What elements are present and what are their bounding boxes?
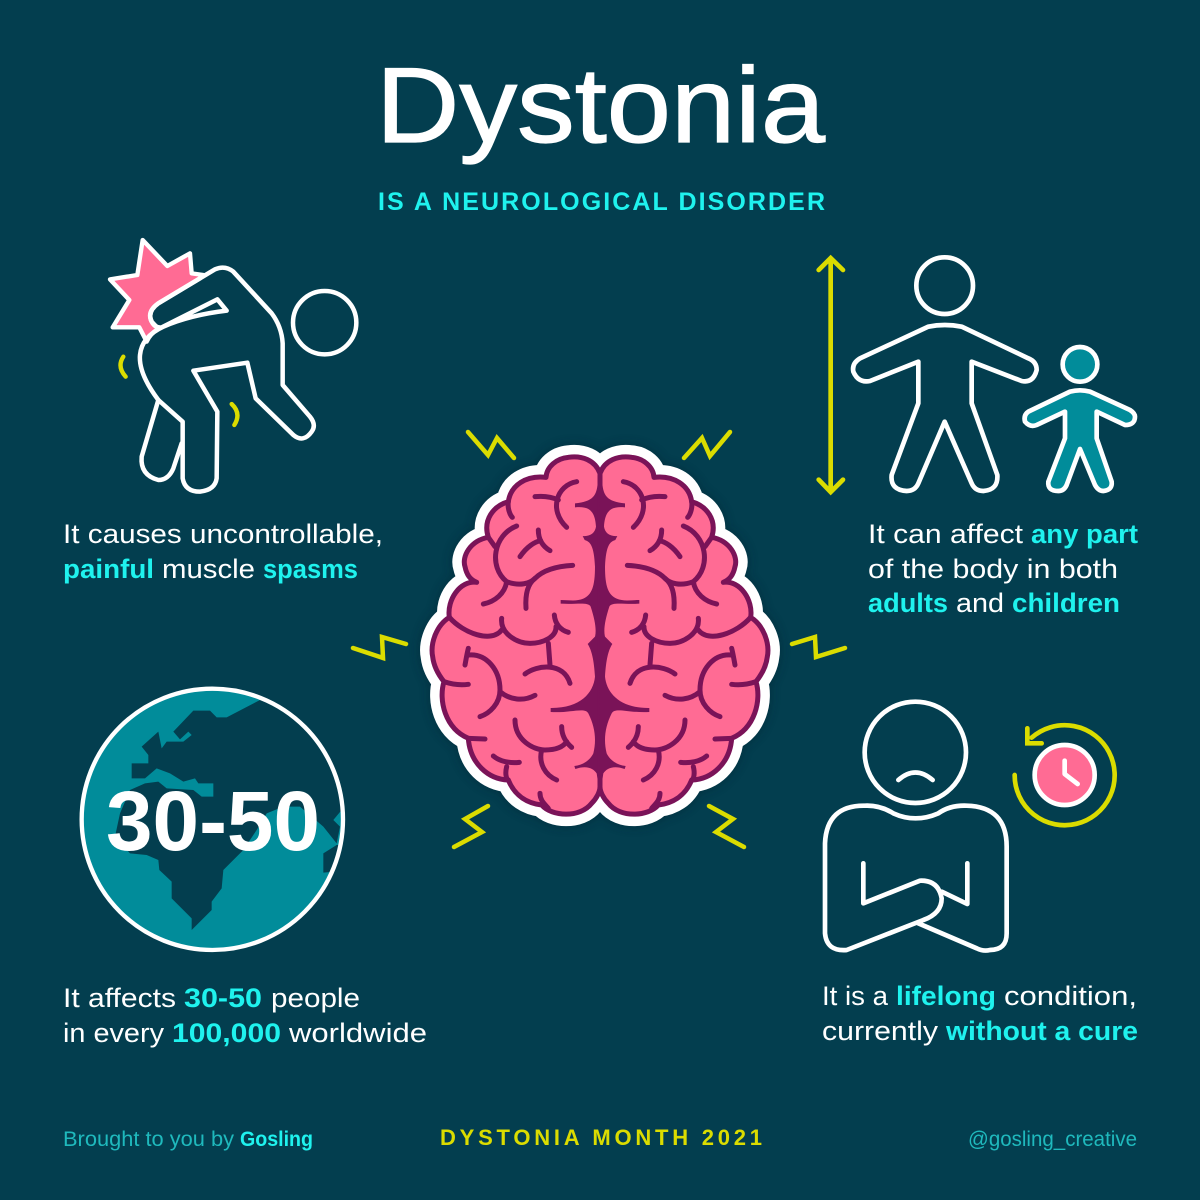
- text: any part of the body: [868, 519, 1138, 618]
- icon: right arm: [942, 863, 967, 904]
- icon: nerve sparks: [353, 432, 845, 847]
- icon: bent body: [140, 268, 314, 492]
- arrow: height: [819, 258, 843, 492]
- text: any part of the body: any part: [1031, 519, 1138, 549]
- text: any part of the body: adults: [868, 588, 948, 618]
- icon: clock hands: [1065, 761, 1078, 784]
- text: prevalence: 30-50: [184, 983, 262, 1013]
- text: lifelong: without a cure: [945, 1016, 1138, 1046]
- brain shadow: [432, 457, 768, 814]
- text: prevalence: [63, 983, 427, 1048]
- icon: clock: [1035, 745, 1095, 805]
- icon: pain burst: [110, 240, 203, 342]
- icon: back leg: [142, 400, 182, 480]
- text: any part of the body: children: [1012, 588, 1120, 618]
- text: lifelong: [822, 981, 1138, 1046]
- panel: adults and children icon: [819, 257, 1135, 492]
- text: lifelong: lifelong: [896, 981, 996, 1011]
- icon: head: [293, 291, 356, 354]
- icon: folded arms body: [825, 806, 1007, 951]
- text: prevalence: It affects: [63, 983, 176, 1013]
- text: any part of the body: of the body in both: [868, 554, 1118, 584]
- globe outline: [82, 689, 343, 950]
- text: prevalence: people: [271, 983, 360, 1013]
- icon: child body: [1025, 390, 1135, 491]
- icon: reverse arrow: [1015, 725, 1115, 825]
- panel: lifelong condition icon: [825, 702, 1115, 951]
- text: muscle spasms: [63, 519, 383, 584]
- text: any part of the body: and: [956, 588, 1004, 618]
- footer: handle: @gosling_creative: [968, 1128, 1137, 1151]
- subtitle: IS A NEUROLOGICAL DISORDER: [378, 188, 825, 216]
- icon: child head: [1063, 347, 1097, 382]
- brain white outline: [432, 457, 768, 814]
- text: muscle spasms: spasms: [263, 554, 358, 584]
- icon: sad head: [865, 702, 966, 803]
- text: lifelong: It is a: [822, 981, 889, 1011]
- icon: tremor marks: [120, 357, 237, 425]
- text: lifelong: condition,: [1004, 981, 1137, 1011]
- brain illustration: [432, 457, 768, 814]
- brain right hemisphere: [600, 457, 768, 814]
- text: prevalence: worldwide: [288, 1018, 427, 1048]
- text: any part of the body: It can affect: [868, 519, 1024, 549]
- footer: credit: Brought to you by: [63, 1128, 235, 1151]
- icon: frown: [898, 772, 933, 780]
- text: lifelong: currently: [822, 1016, 939, 1046]
- icon: adult head: [916, 257, 973, 314]
- icon: adult body: [853, 325, 1037, 491]
- globe number: 30-50: [106, 774, 320, 868]
- text: prevalence: 100,000: [172, 1018, 281, 1048]
- panel: globe: [82, 689, 353, 950]
- text: muscle spasms: muscle: [162, 554, 255, 584]
- globe ocean: [82, 689, 343, 950]
- panel: muscle spasms icon: [110, 240, 356, 492]
- brain left hemisphere: [432, 457, 600, 814]
- footer: campaign: DYSTONIA MONTH 2021: [440, 1125, 762, 1150]
- text: muscle spasms: painful: [63, 554, 154, 584]
- globe land: [115, 693, 353, 930]
- footer: credit: [63, 1128, 313, 1151]
- text: muscle spasms: It causes uncontrollable,: [63, 519, 383, 549]
- title: Dystonia: [376, 45, 826, 165]
- footer: credit: Gosling: [240, 1128, 313, 1151]
- text: prevalence: in every: [63, 1018, 165, 1048]
